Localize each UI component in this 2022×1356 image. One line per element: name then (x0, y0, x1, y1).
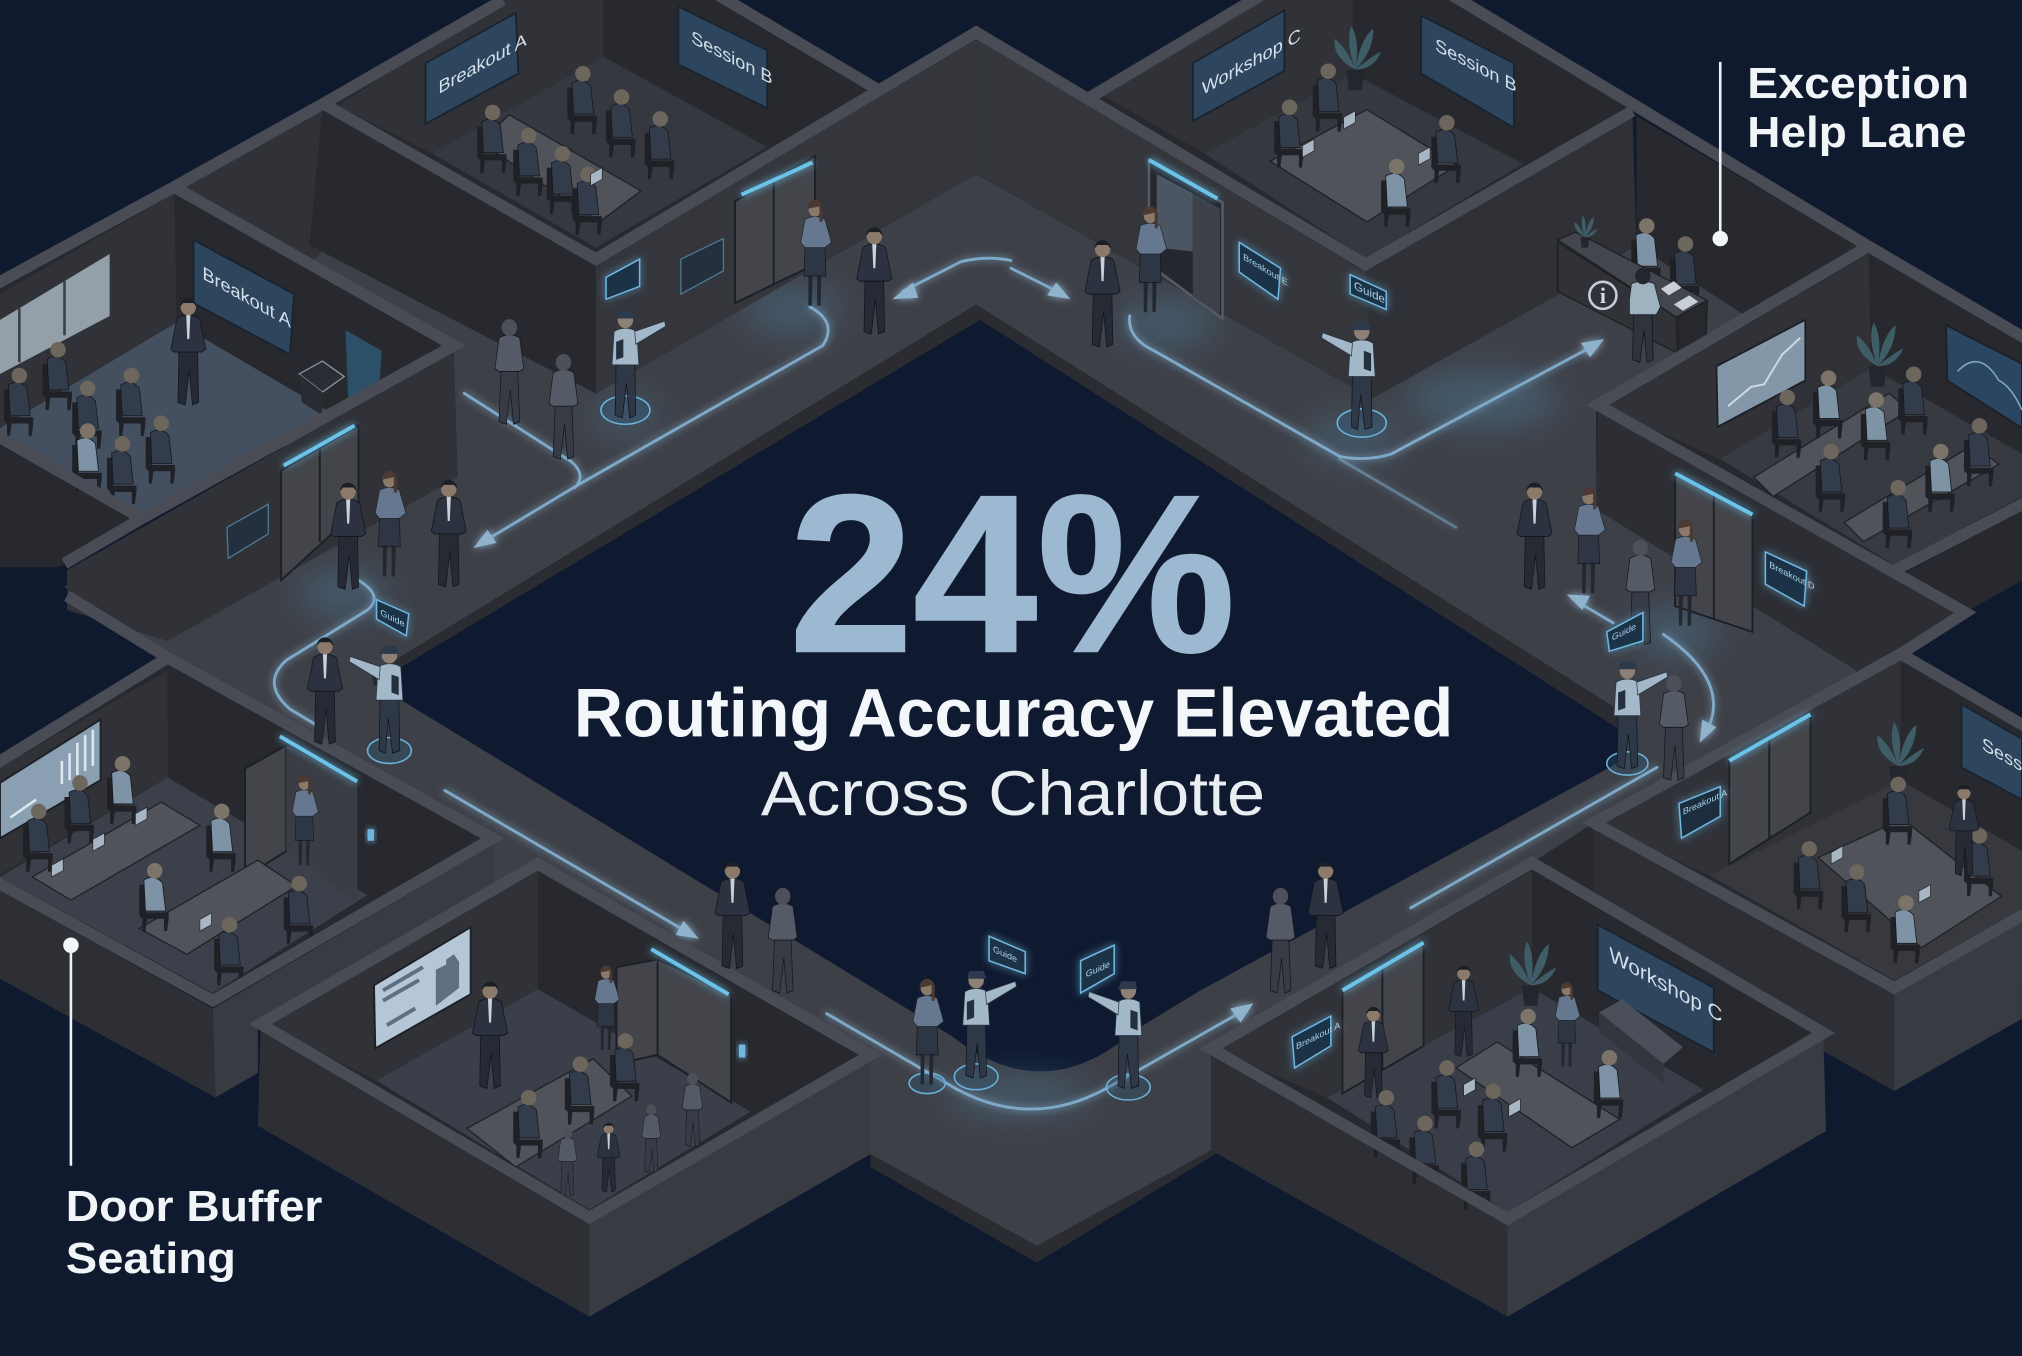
room: Breakout A top (329, 0, 877, 259)
sign: Guide (1350, 275, 1386, 310)
staff behind desk (1631, 218, 1699, 304)
map screen (1946, 325, 2022, 428)
corridor guide signs (377, 600, 1643, 993)
sign: Guide bottom left (989, 936, 1025, 974)
plant (1857, 322, 1903, 387)
sign: Guide: Guide (1354, 278, 1385, 307)
sign: Breakout A: Breakout A (1296, 1020, 1341, 1053)
icon: information: i (1600, 283, 1606, 308)
callout: Exception Help Lane (1713, 59, 1969, 246)
room front wall with door A (67, 351, 458, 641)
sign: Guide left (377, 600, 409, 636)
sign: Guide left: Guide (380, 608, 404, 630)
sign: Breakout A (1679, 787, 1728, 838)
presenter (171, 298, 206, 405)
attendees (513, 965, 703, 1196)
screen: Breakout A (426, 13, 527, 124)
meeting table (480, 115, 641, 222)
attendees (477, 66, 674, 235)
callout: Door Buffer Seating: Door Buffer (66, 1182, 322, 1231)
sign: Guide right: Guide (1612, 621, 1636, 644)
chart screen (1716, 320, 1805, 427)
projection screen (374, 927, 471, 1048)
desk plant (1574, 215, 1598, 248)
headline: Routing Accuracy Elevated (574, 675, 1453, 751)
corridor floor (64, 174, 1857, 1263)
corridor staff rings (368, 396, 1648, 1100)
subheadline: Across Charlotte (761, 759, 1265, 829)
screen: Workshop C (1193, 10, 1301, 121)
room: lower left with projection (258, 864, 870, 1317)
meeting table (1270, 110, 1457, 222)
plant (1510, 941, 1556, 1006)
headline stat: 24% (789, 448, 1235, 699)
door and signs on top-right wall (1149, 160, 1386, 319)
plant (1334, 26, 1381, 90)
speech sign (606, 259, 640, 299)
sign: Guide bottom right (1081, 945, 1114, 993)
callout: Door Buffer Seating (63, 938, 322, 1283)
meeting table (1456, 1042, 1620, 1148)
callout: Door Buffer Seating: Seating (66, 1234, 236, 1283)
sign: Breakout A (1292, 1016, 1341, 1068)
screen: Breakout A: Breakout A (202, 263, 291, 333)
door header lights (280, 160, 1811, 994)
screen: Session B: Session B (691, 28, 772, 89)
attendees (1274, 63, 1461, 227)
room: Workshop C bottom right (1211, 863, 1826, 1317)
podium and side door (299, 330, 382, 415)
attendees (1358, 966, 1623, 1210)
plant (1877, 722, 1924, 787)
corridor people (307, 200, 1702, 1088)
attendees (23, 756, 318, 985)
wayfinding route lines (274, 258, 1716, 1109)
meeting table (467, 1059, 632, 1167)
screen: Session B (1421, 15, 1516, 128)
screen: Session (1961, 704, 2022, 800)
sign: Guide right (1607, 613, 1643, 651)
room: lower left with chart (0, 658, 493, 1097)
chart screen (0, 720, 101, 838)
tables (32, 802, 297, 954)
floor light pools (298, 286, 1720, 1114)
door and signs on top-left wall (606, 156, 815, 303)
screen: Breakout A: Breakout A (438, 29, 527, 99)
meeting table (1818, 819, 2001, 948)
room: Session right (1594, 654, 2022, 1091)
screen: Workshop C: Workshop C (1609, 942, 1722, 1028)
attendees (1794, 777, 1993, 963)
callout: Exception Help Lane: Exception (1747, 59, 1969, 108)
sign: Guide bottom right: Guide (1086, 959, 1110, 980)
tables (1754, 393, 1999, 542)
sign: Breakout E (1239, 242, 1288, 299)
window (0, 254, 110, 374)
sign: Guide bottom left: Guide (993, 944, 1017, 965)
screen: Breakout A (193, 240, 294, 355)
exception help desk (1558, 215, 1707, 353)
icon: information (1589, 282, 1616, 309)
room: Workshop C top (1091, 0, 1633, 264)
desk papers (1661, 281, 1698, 311)
screen: Workshop C: Workshop C (1202, 24, 1301, 100)
sign: Breakout E: Breakout E (1243, 252, 1288, 289)
screen: Session B: Session B (1435, 35, 1516, 97)
small door sign (368, 829, 374, 841)
corridor wall with door D (1596, 410, 2022, 671)
presenter (472, 982, 508, 1088)
attendees (1772, 367, 1993, 548)
room: top right with charts (1598, 246, 2022, 570)
wall block between left rooms (174, 36, 1869, 398)
filler wall (1532, 823, 1625, 980)
central void (371, 304, 1630, 1071)
credenza (1599, 999, 1683, 1083)
door (245, 745, 357, 903)
room: Breakout A left (0, 187, 454, 567)
sign: Breakout A: Breakout A (1683, 787, 1728, 818)
sign: Breakout D: Breakout D (1769, 560, 1814, 593)
screen: Session B (678, 6, 772, 108)
screen: Workshop C (1598, 925, 1722, 1052)
attendees (4, 342, 175, 504)
callout: Exception Help Lane: Help Lane (1747, 108, 1967, 157)
sign: Breakout D (1765, 552, 1814, 606)
